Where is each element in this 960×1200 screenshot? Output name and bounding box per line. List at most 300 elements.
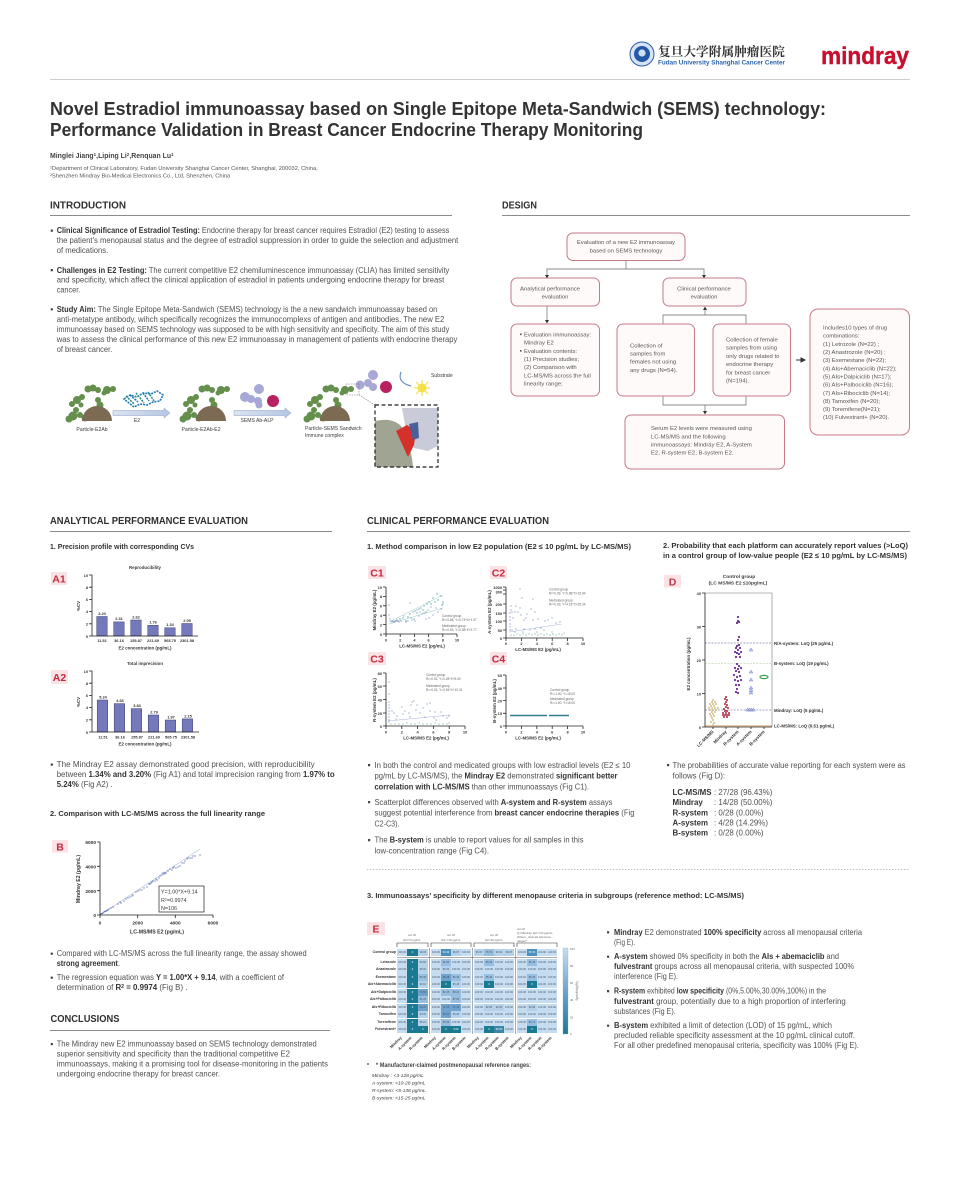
heatmap: specificity by subgroup: 100.00 bbox=[505, 991, 513, 994]
scatter plot: C2 A-system: A-system E2 (pg/mL) bbox=[487, 590, 492, 634]
box: no drug samples: samples from bbox=[630, 352, 665, 358]
dot plot: control group by platform: Control group bbox=[723, 574, 755, 580]
title: Novel Estradiol immunoassay based on Single Epitope Meta-Sandwich (SEMS) technology: bbox=[50, 99, 826, 119]
heatmap: specificity by subgroup: 0 bbox=[412, 951, 413, 954]
text block: E findings: B-system exhibited a limit of detection (LOD) of 15 pg/mL, which bbox=[614, 1021, 832, 1030]
badge: A2: A2 bbox=[53, 672, 66, 684]
text block: comparison findings: Compared with LC-MS/MS across the full linearity range, the assay showed bbox=[57, 949, 307, 958]
footnote: reference ranges: * Manufacturer-claimed postmenopausal reference ranges: bbox=[376, 1062, 531, 1069]
heatmap headers: cut off bbox=[517, 927, 525, 931]
scatter plot: C1 Mindray: 2 bbox=[399, 638, 402, 642]
text block: probabilities bbox=[667, 761, 906, 837]
heatmap: specificity by subgroup: 100.00 bbox=[518, 1013, 526, 1016]
scatter plot: C3 R-system: 6 bbox=[432, 730, 435, 734]
heatmap: specificity by subgroup: 0 bbox=[531, 1028, 533, 1031]
heatmap: specificity by subgroup: 100.00 bbox=[518, 968, 526, 971]
scatter plot: C1 Mindray: R²=0.68, Y=0.74*X+1.97 bbox=[442, 618, 477, 622]
box: analytical performance bbox=[511, 278, 600, 306]
scatter plot: C4 B-system: Medicated group bbox=[550, 697, 574, 701]
heatmap: specificity by subgroup: 0 bbox=[445, 1028, 447, 1031]
text block: probabilities: A-system bbox=[672, 818, 708, 827]
heatmap: specificity by subgroup: 0 bbox=[412, 1006, 413, 1009]
heatmap: specificity by subgroup: 100.00 bbox=[452, 968, 460, 971]
dot plot: control group by platform: LC-MS/MS: LoQ (0.51 pg/mL) bbox=[774, 724, 835, 728]
text block: E findings: substances (Fig E). bbox=[614, 1007, 676, 1016]
scatter plot: C1 Mindray: Medicated group bbox=[442, 624, 466, 628]
text block: C findings: The B-system is unable to report values for all samples in this bbox=[374, 836, 584, 844]
heatmap: specificity by subgroup: 100.00 bbox=[432, 976, 440, 979]
heatmap: specificity by subgroup: 100.00 bbox=[505, 983, 513, 986]
heatmap: specificity by subgroup: 100.00 bbox=[462, 951, 470, 954]
text block: introduction bullets: anti-metatype antibody, wihch specifically recognizes the immunocomplexs of antigen and antibodies. The new E2 bbox=[57, 315, 444, 324]
scatter plot: C4 B-system: 20 bbox=[498, 698, 502, 704]
heading: design: DESIGN bbox=[502, 200, 537, 212]
heatmap: specificity by subgroup: 100.00 bbox=[505, 1006, 513, 1009]
text: AIs+Abemaciclib bbox=[368, 982, 396, 986]
diagram: SEMS sandwich immunoassay principle: Particle-E2Ab-E2 bbox=[181, 427, 221, 433]
heatmap: specificity by subgroup: 100.00 bbox=[548, 951, 556, 954]
box: endocrine therapy samples: only drugs related to bbox=[726, 354, 780, 360]
bar chart: total imprecision: 6 bbox=[86, 693, 89, 698]
heatmap: specificity by subgroup: 100.00 bbox=[518, 951, 526, 954]
heatmap: specificity by subgroup: 100.00 bbox=[398, 976, 406, 979]
dot plot: control group by platform: 20 bbox=[697, 658, 701, 663]
text block: precision findings: between 1.34% and 3.20% (Fig A1) and total imprecision ranging from 1.97% to bbox=[57, 770, 335, 779]
heatmap: specificity by subgroup: 100.00 bbox=[518, 991, 526, 994]
box: endocrine therapy samples: samples from using bbox=[726, 346, 777, 352]
scatter plot: C1 Mindray: 10 bbox=[378, 585, 382, 590]
box: evaluation: based on SEMS technology bbox=[590, 248, 662, 254]
heatmap: specificity by subgroup: 93.94 bbox=[496, 951, 502, 954]
scatter plot: C3 R-system: 2 bbox=[401, 730, 404, 734]
bar chart: reproducibility: 11.51 bbox=[97, 638, 108, 643]
heatmap: specificity by subgroup: 0 bbox=[531, 983, 533, 986]
scatter plot: C1 Mindray: 0 bbox=[385, 638, 387, 642]
scatter plot: Mindray E2 vs LC-MS/MS: R bbox=[161, 898, 165, 904]
heatmap headers: cut off bbox=[408, 933, 416, 937]
heatmap: specificity by subgroup: 5.00 bbox=[453, 1028, 459, 1031]
heatmap colorbar: Specificity(%) bbox=[575, 981, 579, 1001]
heatmap: specificity by subgroup: 100.00 bbox=[538, 998, 546, 1001]
heatmap: specificity by subgroup: 100.00 bbox=[518, 961, 526, 964]
scatter plot: C4 B-system: 0 bbox=[500, 724, 502, 729]
text block: comparison findings bbox=[51, 949, 307, 992]
diagram: SEMS sandwich immunoassay principle: SEMS Ab-ALP bbox=[240, 418, 274, 424]
box: endocrine therapy samples: (N=194). bbox=[726, 378, 749, 384]
heatmap: specificity by subgroup: 100.00 bbox=[485, 1013, 493, 1016]
heatmap: specificity by subgroup: 100.00 bbox=[505, 1013, 513, 1016]
flowchart: study design bbox=[511, 233, 910, 469]
text block: introduction bullets: and specificity, which affect the clinical application of estradiol in patients undergoing endocrine therapy for breast bbox=[57, 276, 445, 284]
box: serum measurement: Serum E2 levels were measured using bbox=[651, 426, 752, 432]
text block: probabilities: Mindray bbox=[672, 798, 703, 807]
scatter plot: C3 R-system: 60 bbox=[378, 684, 382, 689]
box: evaluation contents: (2) Comparison with bbox=[524, 365, 577, 371]
scatter plot: C1 Mindray: 2 bbox=[380, 622, 383, 628]
heatmap colorbar: 60 bbox=[570, 981, 574, 985]
subheading: probability bbox=[663, 541, 909, 560]
bar chart: total imprecision: Total imprecision bbox=[127, 661, 163, 666]
heatmap: specificity by subgroup: 96.67 bbox=[453, 951, 459, 954]
heatmap column labels: B-system bbox=[537, 1035, 553, 1051]
scatter plot: C4 B-system: 0 bbox=[505, 730, 507, 734]
bar chart: reproducibility: 2.05 bbox=[183, 618, 192, 623]
box: endocrine therapy samples: Collection of female bbox=[726, 338, 778, 344]
heatmap: specificity by subgroup: 100.00 bbox=[462, 1013, 470, 1016]
heatmap: specificity by subgroup: 0 bbox=[412, 998, 413, 1001]
text block: introduction bullets: Study Aim: The Single Epitope Meta-Sandwich (SEMS) technology is the a new sandwich immunoassay based on bbox=[57, 305, 437, 314]
bar chart: total imprecision: 221.69 bbox=[148, 734, 161, 740]
box: endocrine therapy samples: for breast cancer bbox=[726, 370, 770, 376]
heatmap: specificity by subgroup: 95.00 bbox=[443, 968, 449, 971]
heatmap: specificity by subgroup: 100.00 bbox=[398, 998, 406, 1001]
text block: C findings: In both the control and medicated groups with low estradiol levels (E2 ≤ 10 bbox=[374, 761, 631, 770]
text block: introduction bullets: immunoassay based on SEMS technology was supposed to be with high sensitivity and specificity. The aim of this study bbox=[57, 325, 449, 334]
heatmap: specificity by subgroup: 100.00 bbox=[452, 961, 460, 964]
heatmap column labels: A-system bbox=[517, 1035, 533, 1051]
heatmap: specificity by subgroup: 80.95 bbox=[443, 1020, 449, 1024]
authors: ,Liping Li bbox=[96, 153, 127, 160]
heatmap column labels bbox=[389, 1035, 553, 1051]
heatmap: specificity by subgroup: 100.00 bbox=[518, 1028, 526, 1031]
box: drug combinations: (8) Tamoxifen (N=20); bbox=[823, 399, 880, 405]
heatmap: specificity by subgroup: 0 bbox=[412, 961, 413, 964]
heatmap: specificity by subgroup: 100.00 bbox=[495, 991, 503, 994]
heatmap: specificity by subgroup: 100.00 bbox=[485, 991, 493, 994]
scatter plot: C2 A-system: 1000 bbox=[493, 585, 502, 590]
bar chart: total imprecision: 565.75 bbox=[165, 734, 178, 740]
heatmap: specificity by subgroup: 100.00 bbox=[475, 983, 483, 986]
badge: C4: C4 bbox=[492, 654, 505, 666]
scatter plot: C1 Mindray: 6 bbox=[380, 604, 383, 608]
heatmap colorbar: 80 bbox=[570, 964, 574, 968]
heatmap headers: ranges* bbox=[517, 939, 528, 943]
heatmap column labels: Mindray bbox=[389, 1035, 403, 1049]
heatmap: specificity by subgroup: 86.36 bbox=[420, 976, 426, 979]
badge: D: D bbox=[669, 576, 677, 588]
bar chart: reproducibility: E2 concentration (pg/mL) bbox=[119, 646, 172, 650]
heatmap: specificity by subgroup: 100.00 bbox=[475, 968, 483, 971]
heatmap: specificity by subgroup: 100.00 bbox=[398, 991, 406, 994]
scatter plot: C2 A-system: 50 bbox=[498, 628, 502, 633]
heatmap: specificity by subgroup: 71.43 bbox=[453, 1006, 459, 1009]
heatmap: specificity by subgroup: 100.00 bbox=[505, 1020, 513, 1024]
footnote: reference ranges: Mindray : <3-128 pg/mL bbox=[372, 1073, 424, 1079]
icon: SEMS antibody with ALP bbox=[240, 384, 279, 408]
diagram: SEMS sandwich immunoassay principle bbox=[66, 370, 453, 467]
scatter plot: C4 B-system: R²=1.00, Y=15.00 bbox=[550, 701, 575, 705]
scatter plot: C3 R-system: 4 bbox=[417, 730, 420, 734]
heatmap: specificity by subgroup: 92.86 bbox=[529, 1006, 535, 1009]
scatter plot: Mindray E2 vs LC-MS/MS: Mindray E2 (pg/mL) bbox=[76, 855, 82, 903]
box: clinical performance: evaluation bbox=[691, 294, 717, 300]
box: drug combinations: (2) Anastrozole (N=20) ; bbox=[823, 350, 886, 356]
heatmap: specificity by subgroup: 100.00 bbox=[538, 976, 546, 979]
bar chart: total imprecision bbox=[76, 661, 199, 746]
logo: Fudan University Shanghai Cancer Center: 复旦大学附属肿瘤医院 bbox=[658, 41, 785, 60]
footnote: reference ranges: A-system: <10-28 pg/mL bbox=[371, 1080, 426, 1086]
heatmap: specificity by subgroup: 100.00 bbox=[495, 961, 503, 964]
heatmap: specificity by subgroup: 100.00 bbox=[398, 1013, 406, 1016]
text: Tamoxifen bbox=[379, 1012, 396, 1016]
heatmap: specificity by subgroup: 100.00 bbox=[475, 961, 483, 964]
bar chart: reproducibility: 0 bbox=[86, 634, 88, 639]
text block: probabilities: : 27/28 (96.43%) bbox=[714, 788, 773, 797]
bar chart: total imprecision: %CV bbox=[76, 697, 81, 707]
heatmap: specificity by subgroup: 100.00 bbox=[432, 998, 440, 1001]
authors: 1 bbox=[94, 152, 97, 157]
text block: conclusions: superior sensitivity and specificity than the traditional competitive E2 bbox=[57, 1050, 290, 1058]
box: endocrine therapy samples: endocrine therapy bbox=[726, 362, 773, 368]
heatmap: specificity by subgroup: 100.00 bbox=[538, 1013, 546, 1016]
scatter plot: C4 B-system: 10 bbox=[581, 730, 585, 734]
heatmap: specificity by subgroup: 95.45 bbox=[453, 983, 459, 986]
text: AIs+Ribociclib bbox=[372, 1005, 396, 1009]
scatter plot: C3 R-system: Medicated group bbox=[426, 684, 450, 688]
box: evaluation contents bbox=[511, 324, 600, 396]
subheading: probability: 2. Probability that each platform can accurately report values (>LoQ) bbox=[663, 541, 909, 550]
box: drug combinations: (3) Exemestane (N=22); bbox=[823, 358, 886, 364]
scatter plot: C4 B-system: 4 bbox=[536, 730, 539, 734]
heatmap: specificity by subgroup: 100.00 bbox=[462, 1020, 470, 1024]
badge: B: B bbox=[56, 842, 64, 854]
dot plot: control group by platform: 40 bbox=[697, 591, 701, 596]
text block: conclusions: immunoassays, making it a promising tool for disease-monitoring in the patients bbox=[57, 1060, 328, 1068]
scatter plot: C1 Mindray: 6 bbox=[428, 638, 431, 642]
scatter plot: C1 Mindray: 8 bbox=[442, 638, 445, 642]
box: evaluation contents: (1) Precision studies; bbox=[524, 357, 579, 363]
heading: conclusions: CONCLUSIONS bbox=[50, 1014, 120, 1025]
heatmap: specificity by subgroup: 100.00 bbox=[432, 1020, 440, 1024]
heatmap: specificity by subgroup: 91.82 bbox=[420, 961, 426, 964]
heatmap: specificity by subgroup: 100.00 bbox=[538, 991, 546, 994]
heatmap: specificity by subgroup: 100.00 bbox=[485, 968, 493, 971]
heatmap: specificity by subgroup: 100.00 bbox=[462, 968, 470, 971]
text block: E findings: For all other predefined menopausal criteria, specificity was 100% (Fig E). bbox=[614, 1041, 859, 1050]
heatmap: specificity by subgroup: 95.00 bbox=[420, 968, 426, 971]
logo: Fudan University Shanghai Cancer Center bbox=[630, 41, 785, 66]
heatmap: specificity by subgroup: 100.00 bbox=[475, 1028, 483, 1031]
bar chart: reproducibility: 36.16 bbox=[114, 638, 125, 643]
scatter plot: Mindray E2 vs LC-MS/MS: 2 bbox=[165, 898, 167, 902]
scatter plot: Mindray E2 vs LC-MS/MS: 2000 bbox=[85, 889, 96, 895]
scatter plot: C2 A-system: LC-MS/MS E2 (pg/mL) bbox=[515, 647, 561, 652]
scatter plot: C4 B-system: 60 bbox=[498, 673, 502, 678]
heatmap: specificity by subgroup: 64.29 bbox=[420, 1006, 426, 1009]
heatmap: specificity by subgroup: 100.00 bbox=[538, 983, 546, 986]
heatmap: specificity by subgroup: 100.00 bbox=[432, 1028, 440, 1031]
subheading: method comparison: 1. Method comparison in low E2 population (E2 ≤ 10 pg/mL by LC-MS/MS) bbox=[367, 542, 632, 551]
dot plot: control group by platform: 30 bbox=[697, 624, 701, 630]
box: serum measurement: immunoassays: Mindray E2, A-System bbox=[651, 442, 752, 448]
badge: E: E bbox=[372, 924, 380, 936]
bar chart: reproducibility: Reproducibility bbox=[129, 565, 162, 570]
dot plot: control group by platform: A-system bbox=[735, 729, 753, 747]
text block: probabilities: : 4/28 (14.29%) bbox=[714, 818, 768, 827]
box: no drug samples: Collection of bbox=[630, 343, 663, 349]
text block: introduction bullets bbox=[51, 226, 459, 354]
scatter plot: C3 R-system: R-system E2 (pg/mL) bbox=[372, 678, 377, 722]
footnote: reference ranges bbox=[367, 1062, 531, 1102]
box: serum measurement: E2, R-system E2, B-system E2. bbox=[651, 451, 734, 457]
scatter plot: C2 A-system: 2 bbox=[520, 641, 523, 646]
heatmap: specificity by subgroup: 100.00 bbox=[495, 1013, 503, 1016]
dot plot: control group by platform bbox=[686, 574, 835, 748]
heatmap: specificity by subgroup: 86.36 bbox=[486, 976, 492, 979]
text block: probabilities: R-system bbox=[672, 808, 708, 817]
heatmap: specificity by subgroup: 100.00 bbox=[538, 968, 546, 971]
heatmap: specificity by subgroup: 100.00 bbox=[505, 961, 513, 964]
text block: C findings bbox=[368, 761, 634, 855]
text block: comparison findings: (Fig B) . bbox=[159, 983, 187, 992]
scatter plot: C4 B-system: 2 bbox=[520, 730, 523, 734]
heatmap colorbar bbox=[563, 947, 579, 1036]
bar chart: reproducibility: 2301.58 bbox=[180, 638, 195, 643]
logo: Fudan University Shanghai Cancer Center: Fudan University Shanghai Cancer Center bbox=[658, 60, 785, 66]
bar chart: total imprecision: 4 bbox=[86, 705, 89, 710]
heatmap: specificity by subgroup: 100.00 bbox=[462, 976, 470, 979]
heatmap: specificity by subgroup: 100.00 bbox=[442, 998, 450, 1001]
scatter plot: C1 Mindray: 4 bbox=[413, 638, 416, 642]
authors: Minglei Jiang bbox=[50, 153, 94, 160]
box: drug combinations: Includes10 types of drug bbox=[823, 326, 887, 332]
heatmap: specificity by subgroup: 93.33 bbox=[420, 951, 426, 954]
badge: A1: A1 bbox=[52, 574, 66, 586]
heatmap: specificity by subgroup: 100.00 bbox=[452, 1020, 460, 1024]
box: no drug samples: females not using bbox=[630, 360, 676, 366]
scatter plot: C1 Mindray: 8 bbox=[380, 594, 383, 599]
text block: E findings: precluded reliable specificity assessment at the 10 pg/mL clinical cutoff. bbox=[614, 1031, 855, 1040]
heatmap: specificity by subgroup: 86.36 bbox=[529, 961, 535, 964]
scatter plot: Mindray E2 vs LC-MS/MS: 4000 bbox=[170, 920, 181, 926]
heatmap: specificity by subgroup: 95.24 bbox=[420, 1020, 426, 1024]
heatmap: specificity by subgroup: 100.00 bbox=[495, 976, 503, 979]
heatmap: specificity by subgroup: 78.79 bbox=[486, 951, 492, 954]
affiliations bbox=[50, 166, 318, 180]
scatter plot: C4 B-system: B-system E2 (pg/mL) bbox=[492, 679, 497, 723]
bar chart: total imprecision: 36.16 bbox=[115, 734, 126, 740]
text block: introduction bullets: cancer. bbox=[57, 286, 80, 294]
heatmap: specificity by subgroup: 100.00 bbox=[528, 1013, 536, 1016]
text block: comparison findings: = 0.9974 bbox=[124, 983, 158, 992]
box: evaluation bbox=[567, 233, 685, 260]
text block: E findings: R-system exhibited low specificity (0%,5.00%,30.00%,100%) in the bbox=[614, 986, 827, 996]
scatter plot: C1 Mindray: Mindray E2 (pg/mL) bbox=[372, 589, 377, 630]
box: drug combinations: combinations: bbox=[823, 334, 860, 340]
text block: probabilities: LC-MS/MS bbox=[672, 788, 712, 797]
heatmap headers: Others : claimed reference bbox=[517, 935, 551, 939]
heatmap: specificity by subgroup: 100.00 bbox=[462, 983, 470, 986]
dot plot: control group by platform: 10 bbox=[697, 692, 701, 696]
text block: E findings bbox=[607, 928, 863, 1050]
dot plot: control group by platform: LC-MS/MS bbox=[696, 729, 715, 748]
text block: comparison findings: 2 bbox=[121, 984, 124, 990]
scatter plot: C3 R-system: 20 bbox=[378, 711, 382, 716]
badge: D bbox=[664, 575, 681, 588]
heatmap: specificity by subgroup: 100.00 bbox=[475, 976, 483, 979]
bar chart: total imprecision: 2301.58 bbox=[181, 734, 196, 740]
heatmap: specificity by subgroup: 100.00 bbox=[398, 968, 406, 971]
heatmap: specificity by subgroup: 100.00 bbox=[548, 983, 556, 986]
heatmap: specificity by subgroup: 82.35 bbox=[443, 991, 449, 994]
scatter plot: C4 B-system: 8 bbox=[567, 730, 570, 734]
authors: ,Renquan Lu bbox=[129, 153, 171, 160]
scatter plot: Mindray E2 vs LC-MS/MS: 6000 bbox=[85, 840, 96, 846]
heatmap colorbar: 0 bbox=[570, 1032, 572, 1036]
text block: C findings: Scatterplot differences observed with A-system and R-system assays bbox=[374, 798, 613, 807]
heatmap: specificity by subgroup: 96.97 bbox=[506, 951, 512, 954]
heatmap: specificity by subgroup: 65.00 bbox=[443, 1013, 449, 1016]
bar chart: total imprecision: 4.66 bbox=[116, 698, 125, 703]
dot plot: control group by platform: Mindray bbox=[712, 729, 728, 745]
icon: sun bbox=[414, 380, 430, 396]
diagram: SEMS sandwich immunoassay principle: E2 bbox=[134, 418, 140, 424]
arrow: E2 bbox=[113, 408, 170, 418]
bar chart: reproducibility: 3.20 bbox=[98, 611, 106, 616]
box: analytical performance: evaluation bbox=[542, 294, 568, 300]
bar chart: total imprecision: 5.24 bbox=[99, 694, 108, 700]
heatmap: specificity by subgroup: 100.00 bbox=[518, 983, 526, 986]
heatmap: specificity by subgroup: 53.33 bbox=[443, 951, 449, 954]
bar chart: total imprecision: 2.15 bbox=[184, 714, 193, 718]
text block: conclusions: The Mindray new E2 immunoassay based on SEMS technology demonstrated bbox=[57, 1040, 317, 1048]
subheading: specificity: 3. Immunoassays’ specificity by different menopause criteria in subgroups (reference method: LC-MS/MS) bbox=[367, 891, 745, 900]
heatmap: specificity by subgroup: 100.00 bbox=[475, 1013, 483, 1016]
heatmap: specificity by subgroup: 100.00 bbox=[398, 1028, 406, 1031]
text: Fulvestrant+ bbox=[375, 1027, 396, 1031]
bar chart: total imprecision: 2.79 bbox=[150, 710, 159, 714]
heatmap: specificity by subgroup: 100.00 bbox=[432, 951, 440, 954]
text block: E findings: Mindray E2 demonstrated 100% specificity across all menopausal criteria bbox=[614, 928, 863, 937]
heatmap column labels: R-system bbox=[484, 1035, 500, 1051]
heatmap column labels: A-system bbox=[431, 1035, 447, 1051]
heatmap: specificity by subgroup: 100.00 bbox=[432, 968, 440, 971]
bar chart: reproducibility: 6 bbox=[86, 597, 89, 602]
scatter plot: Mindray E2 vs LC-MS/MS: 6000 bbox=[208, 920, 219, 926]
scatter plot: C2 A-system: 100 bbox=[496, 619, 502, 624]
box: evaluation contents: LC-MS/MS across the full bbox=[524, 373, 591, 379]
scatter plot: C2 A-system: 0 bbox=[500, 636, 502, 641]
heatmap: specificity by subgroup: 0 bbox=[422, 1028, 424, 1031]
text block: E findings: (Fig E). bbox=[614, 938, 635, 947]
scatter plot: C2 A-system: 0 bbox=[505, 641, 507, 646]
heatmap: specificity by subgroup: 100.00 bbox=[538, 1006, 546, 1009]
icon: particle sandwich complex bbox=[304, 384, 354, 422]
text block: probabilities: B-system bbox=[672, 828, 708, 837]
text block: precision findings bbox=[51, 760, 335, 789]
bar chart: reproducibility: 10 bbox=[84, 573, 88, 578]
heatmap column labels: B-system bbox=[451, 1035, 467, 1051]
heatmap column labels: R-system bbox=[441, 1035, 457, 1051]
diagram: SEMS sandwich immunoassay principle: Immune complex bbox=[305, 433, 344, 439]
heatmap: specificity by subgroup: 100.00 bbox=[485, 1020, 493, 1024]
heatmap: specificity by subgroup: 100.00 bbox=[548, 976, 556, 979]
heatmap: specificity by subgroup: 100.00 bbox=[398, 983, 406, 986]
heatmap: specificity by subgroup: 100.00 bbox=[538, 961, 546, 964]
scatter plot: C2 A-system: R²=0.03, Y=4.19*X+35.34 bbox=[549, 602, 586, 606]
scatter plot: C2 A-system: Control group bbox=[549, 588, 569, 592]
scatter plot: C4 B-system: R²=1.00, Y=15.00 bbox=[550, 692, 575, 696]
scatter plot: C3 R-system: Control group bbox=[426, 673, 446, 677]
text block: conclusions bbox=[51, 1040, 328, 1078]
heatmap: specificity by subgroup: 92.86 bbox=[496, 1006, 502, 1009]
icon: substrate arrow bbox=[400, 372, 411, 386]
badge: C1: C1 bbox=[370, 568, 384, 580]
scatter plot: C2 A-system: 200 bbox=[496, 602, 502, 607]
dot plot: control group by platform: (LC MS/MS E2 ≤10pg/mL) bbox=[709, 580, 768, 586]
heatmap: specificity by subgroup: 87.50 bbox=[453, 998, 459, 1001]
scatter plot: Mindray E2 vs LC-MS/MS: 0 bbox=[93, 913, 96, 919]
